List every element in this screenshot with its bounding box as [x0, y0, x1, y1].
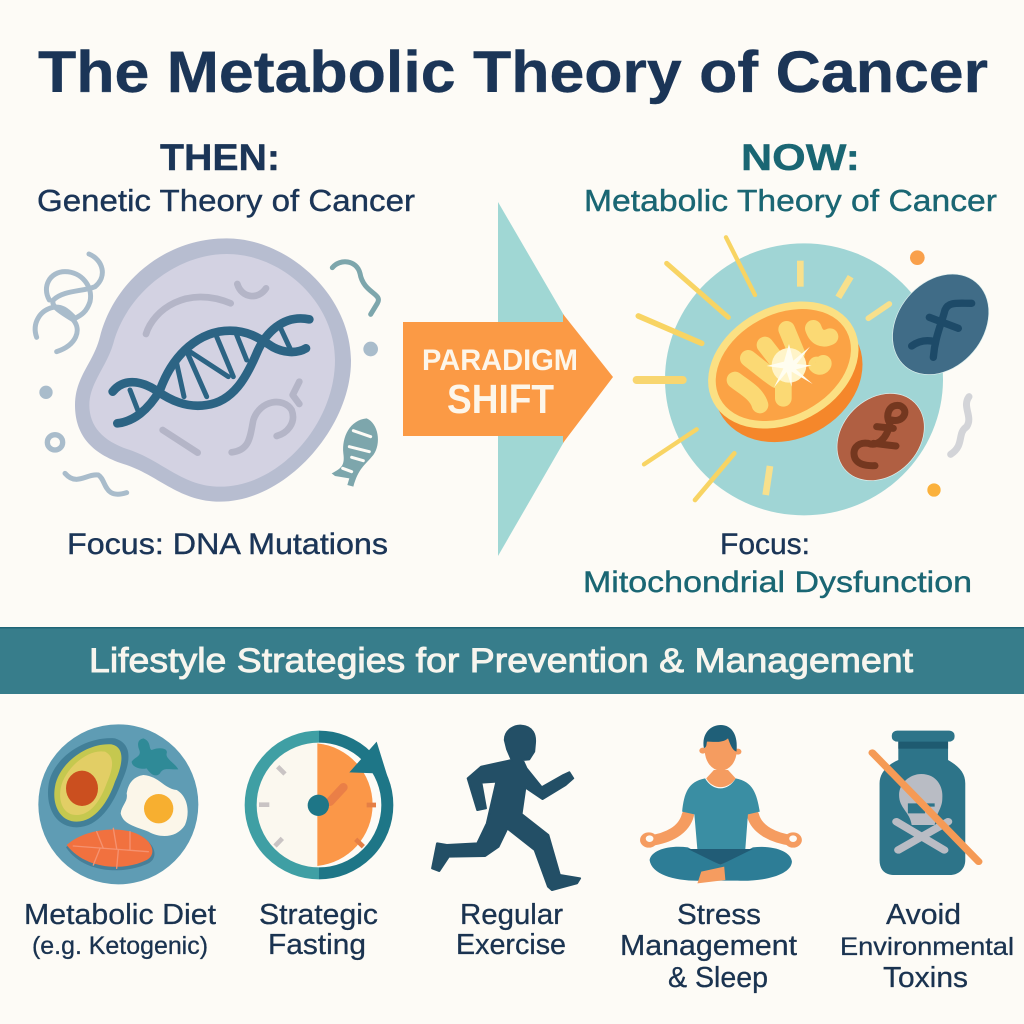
- icon: clock: [247, 733, 392, 877]
- banner heading: Lifestyle Strategies for Prevention & Management: [89, 642, 914, 680]
- label: exercise: Exercise: [456, 929, 566, 961]
- strategy: stress management: [620, 725, 802, 994]
- icon: meditating person: [640, 725, 802, 883]
- label: strategic: Strategic: [259, 899, 378, 931]
- icon: food plate: [38, 724, 198, 884]
- rays: [637, 237, 889, 500]
- dots: [39, 342, 378, 450]
- teal squiggle: [332, 262, 378, 314]
- teal cell: [665, 243, 943, 515]
- label: stress: Stress: [677, 899, 761, 931]
- label: management: Management: [620, 930, 797, 962]
- gray squiggle: [951, 397, 969, 454]
- label: fasting: Fasting: [268, 929, 366, 961]
- cell: [75, 238, 351, 502]
- label: avoid: Avoid: [886, 899, 961, 931]
- icon: runner: [432, 726, 580, 890]
- panel: then: [35, 137, 415, 561]
- now focus detail: Mitochondrial Dysfunction: [583, 566, 972, 599]
- arrow label 2: SHIFT: [447, 376, 554, 422]
- then focus: Focus: DNA Mutations: [67, 528, 388, 561]
- floating strands: [35, 254, 127, 494]
- label: regular: Regular: [460, 899, 563, 931]
- label: toxins: Toxins: [883, 962, 968, 994]
- strategy: metabolic diet: [24, 724, 216, 960]
- banner: [0, 627, 1024, 694]
- then heading: THEN:: [160, 137, 280, 178]
- brown mitochondrion: [819, 376, 942, 498]
- label: metabolic diet: Metabolic Diet: [24, 899, 216, 931]
- orange arrow: [403, 314, 613, 443]
- strategy: avoid toxins: [840, 731, 1014, 994]
- icon: poison bottle: [872, 731, 979, 875]
- panel: now: [583, 137, 1009, 599]
- illustration: cell with DNA: [35, 238, 378, 502]
- glowing mitochondrion: [686, 276, 886, 467]
- now heading: NOW:: [741, 137, 860, 178]
- strategy: regular exercise: [432, 726, 580, 961]
- strategy: strategic fasting: [247, 733, 392, 961]
- title: The Metabolic Theory of Cancer: [38, 40, 988, 105]
- dark mitochondrion: [873, 255, 1009, 394]
- paradigm shift arrow: [403, 202, 613, 556]
- small DNA: [332, 418, 378, 487]
- teal triangle: [498, 202, 565, 556]
- arrow label: PARADIGM: [422, 344, 578, 377]
- label: ketogenic: (e.g. Ketogenic): [32, 932, 208, 960]
- label: environmental: Environmental: [840, 933, 1014, 961]
- now subheading: Metabolic Theory of Cancer: [584, 183, 997, 218]
- DNA helix: [113, 318, 309, 423]
- then subheading: Genetic Theory of Cancer: [37, 183, 415, 218]
- illustration: mitochondria: [637, 237, 1009, 515]
- label: and sleep: & Sleep: [668, 962, 768, 994]
- orange dots: [910, 250, 941, 497]
- now focus label: Focus:: [720, 528, 810, 561]
